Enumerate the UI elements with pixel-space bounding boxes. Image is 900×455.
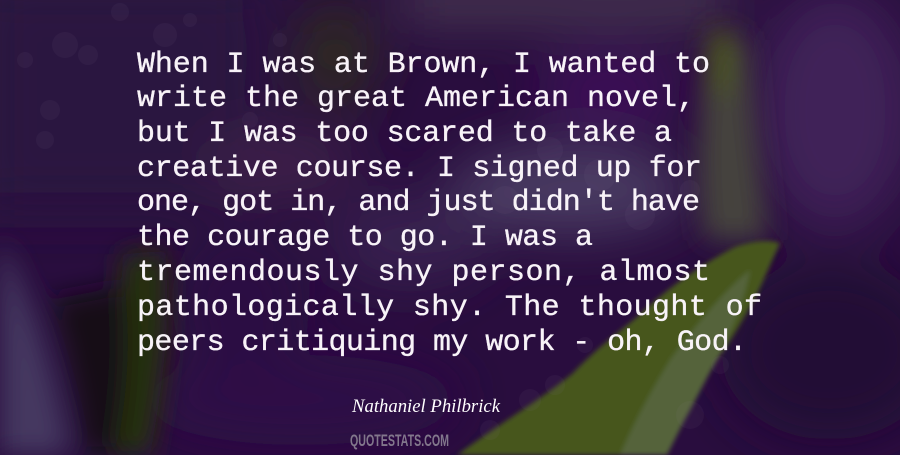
quote text: tremendously shy person, almost xyxy=(137,256,710,290)
quote text: peers critiquing my work - oh, God. xyxy=(137,326,747,360)
quote text: but I was too scared to take a xyxy=(137,117,672,151)
quote text: pathologically shy. The thought of xyxy=(137,291,762,325)
author signature: Nathaniel Philbrick xyxy=(351,396,501,417)
quote text: the courage to go. I was a xyxy=(137,221,593,255)
dew drops xyxy=(17,3,729,440)
watermark: QUOTESTATS.COM xyxy=(350,431,449,450)
quote text: When I was at Brown, I wanted to xyxy=(137,48,710,82)
quote text: creative course. I signed up for xyxy=(137,152,702,186)
quote text: one, got in, and just didn't have xyxy=(137,186,700,220)
quote text xyxy=(137,48,762,360)
quote text: write the great American novel, xyxy=(137,82,695,116)
